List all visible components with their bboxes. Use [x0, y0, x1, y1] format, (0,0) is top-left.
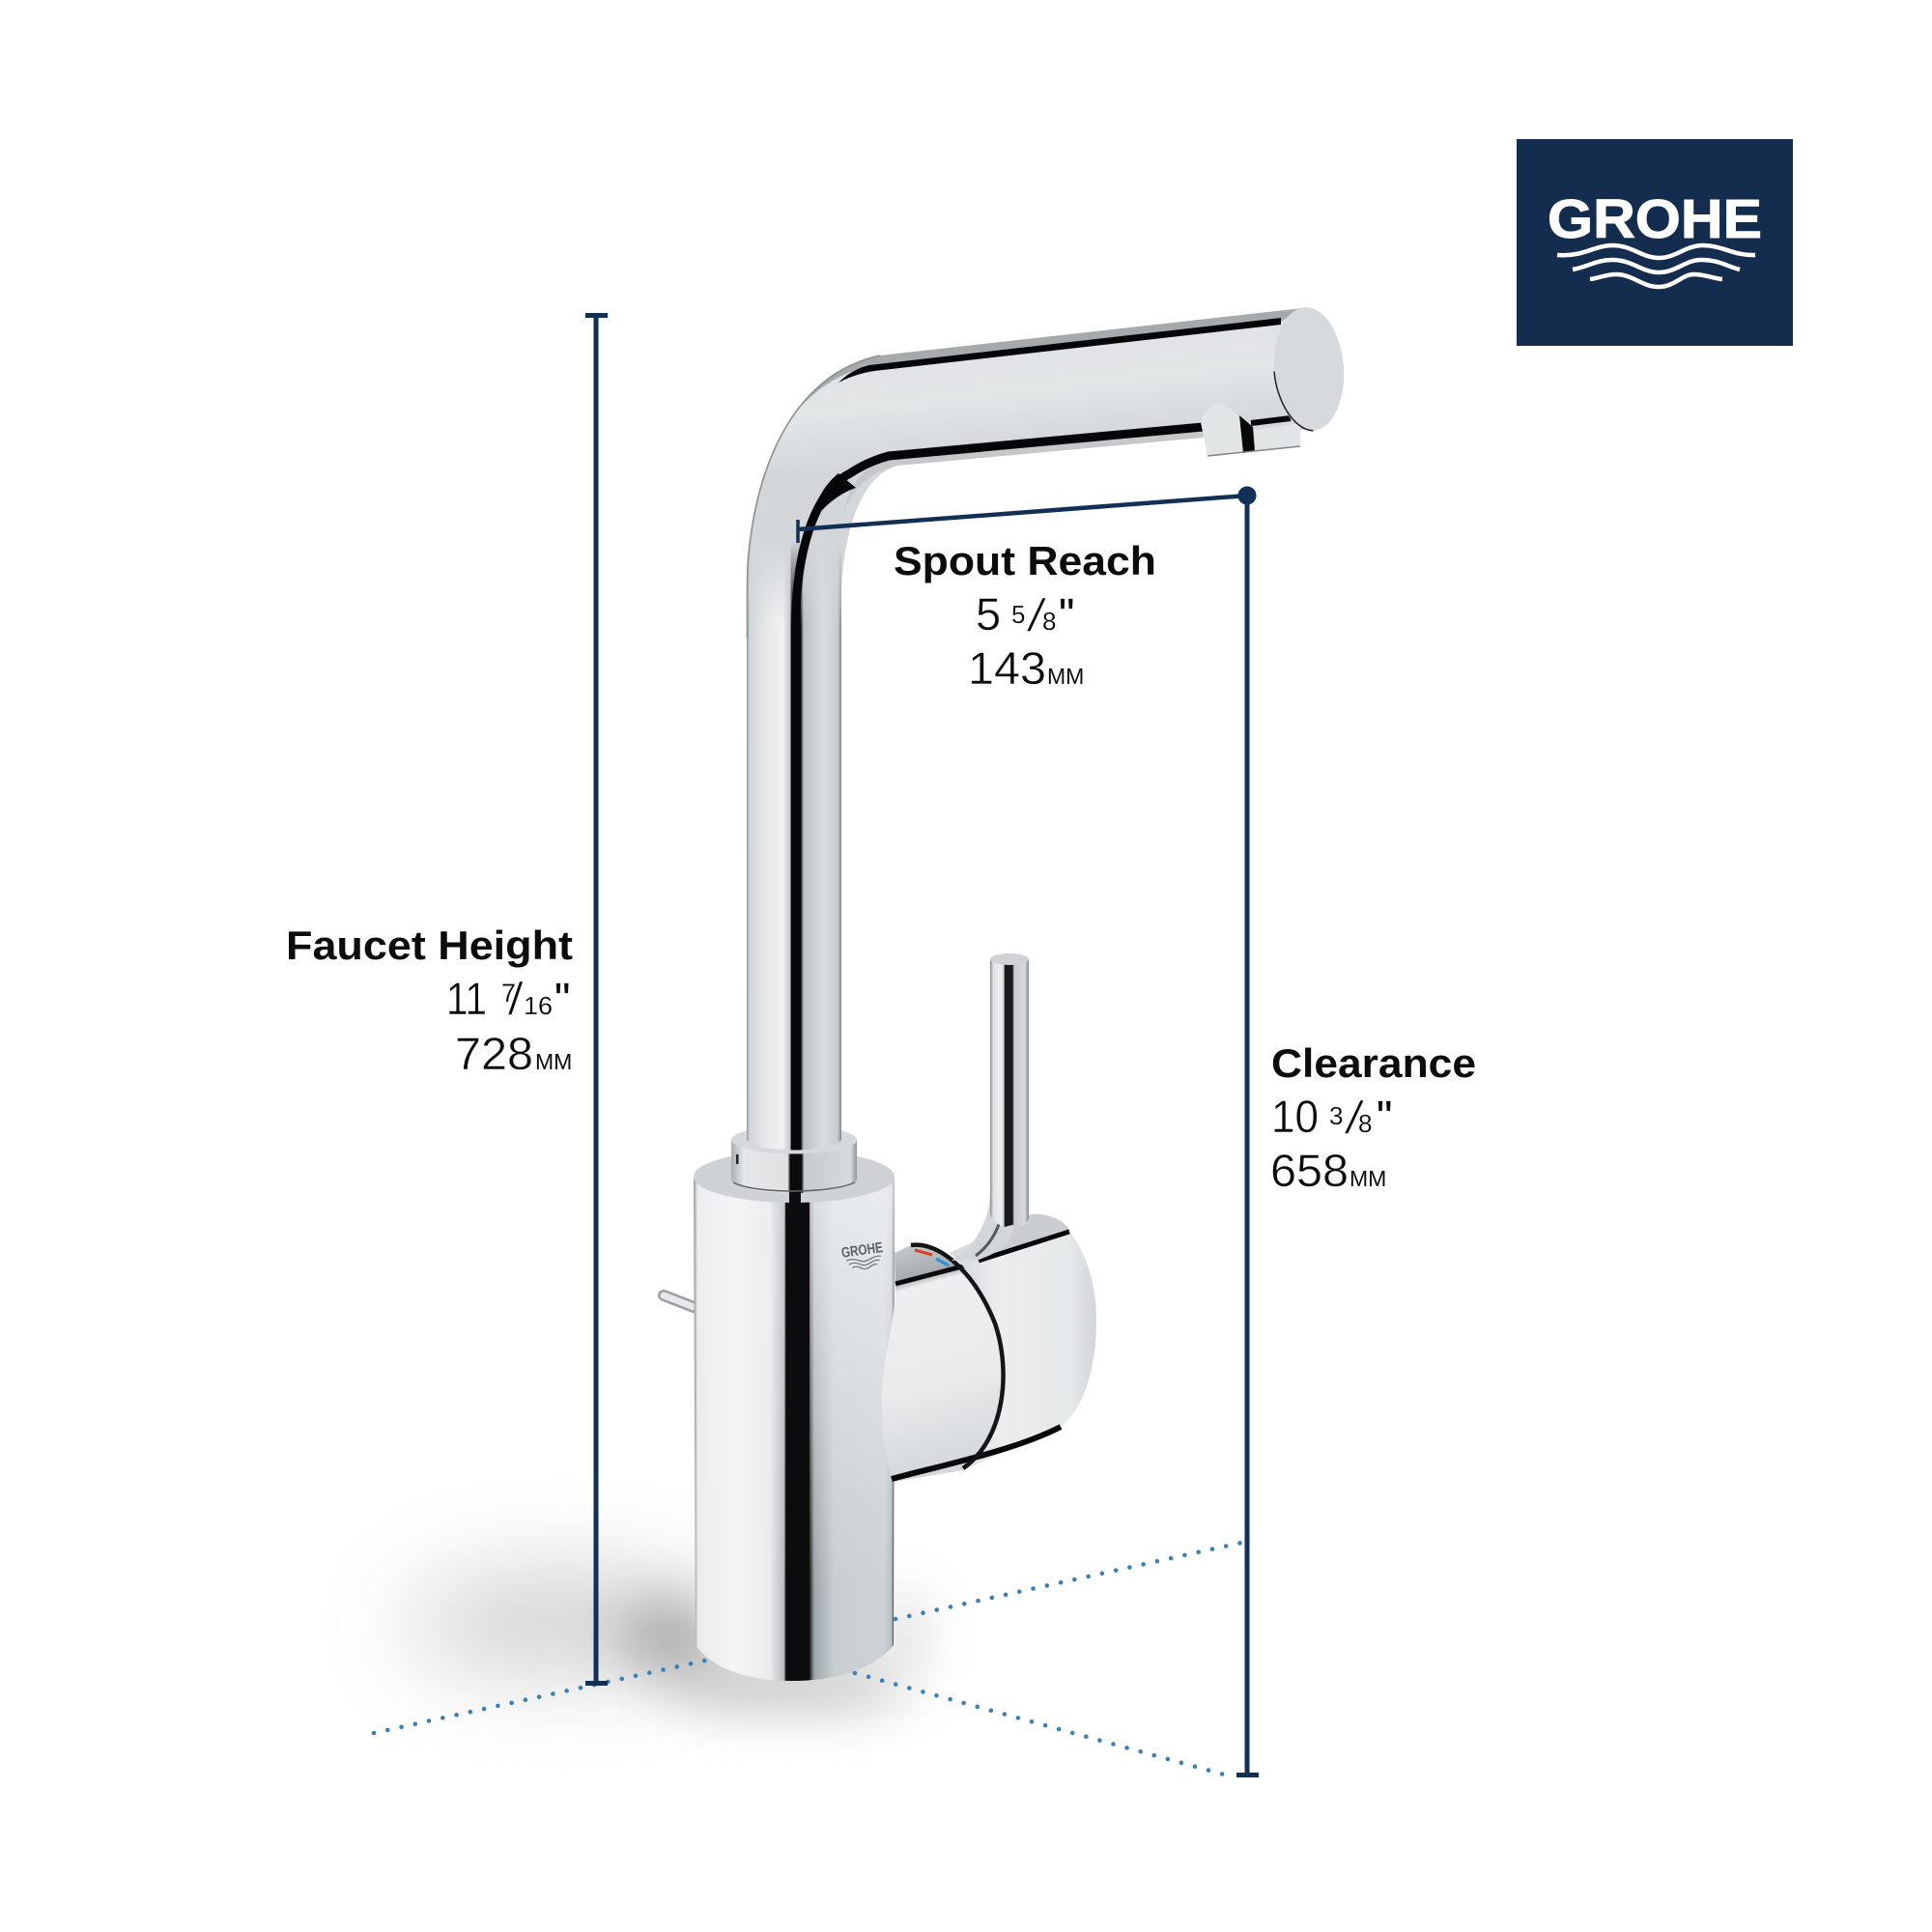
- text: spout reach: [894, 538, 1156, 694]
- body top disc: [694, 1151, 895, 1203]
- hot and cold indicators: [915, 1250, 949, 1265]
- faucet body: [694, 1179, 895, 1681]
- logo: GROHE: [1517, 139, 1793, 346]
- text: faucet height: 7: [501, 979, 516, 1008]
- spout end cap: [1270, 305, 1348, 433]
- lever: [952, 953, 1029, 1261]
- text: faucet height: MM: [535, 1049, 572, 1074]
- text: spout reach: 5: [1011, 600, 1025, 629]
- text: clearance: MM: [1350, 1166, 1386, 1191]
- text: faucet height: 11: [446, 973, 487, 1024]
- handle: [892, 1213, 1096, 1479]
- faucet neck: [882, 1245, 1004, 1482]
- text: spout reach: 5: [976, 588, 1001, 639]
- dimension line: spout reach: [798, 487, 1256, 543]
- text: clearance: 8: [1358, 1109, 1372, 1138]
- text: spout reach: Spout Reach: [894, 538, 1156, 583]
- dimension line: clearance: [1236, 496, 1259, 1777]
- text: faucet height: /: [507, 973, 525, 1024]
- text: faucet height: [286, 923, 573, 1079]
- text: clearance: 658: [1270, 1145, 1349, 1196]
- icon: faucet: [664, 305, 1348, 1681]
- spout: [747, 308, 1316, 1150]
- collar: [731, 1126, 857, 1193]
- logo: GROHE: GROHE: [1548, 188, 1762, 250]
- text: clearance: [1270, 1040, 1476, 1196]
- text: clearance: ": [1377, 1092, 1392, 1142]
- drain rod: [664, 1295, 694, 1307]
- text: spout reach: 8: [1042, 607, 1056, 636]
- text: faucet height: ": [554, 974, 570, 1024]
- text: clearance: Clearance: [1271, 1040, 1476, 1086]
- text: clearance: 3: [1329, 1101, 1343, 1130]
- text: spout reach: ": [1059, 589, 1074, 639]
- text: faucet height: Faucet Height: [286, 923, 573, 968]
- dotted floor lines: [374, 1543, 1241, 1777]
- text: clearance: /: [1343, 1093, 1366, 1144]
- dimension line: faucet height: [585, 313, 608, 1686]
- spout nozzle: [1201, 405, 1300, 456]
- text: faucet height: 16: [524, 991, 553, 1020]
- shadow under faucet: [406, 1573, 923, 1709]
- text: clearance: 10: [1271, 1091, 1319, 1142]
- text: spout reach: /: [1025, 590, 1048, 641]
- text: spout reach: MM: [1047, 664, 1084, 689]
- small GROHE mark on body: GROHE: [840, 1239, 884, 1262]
- text: spout reach: 143: [968, 642, 1046, 694]
- text: faucet height: 728: [455, 1028, 533, 1079]
- small GROHE mark on body: [840, 1239, 885, 1272]
